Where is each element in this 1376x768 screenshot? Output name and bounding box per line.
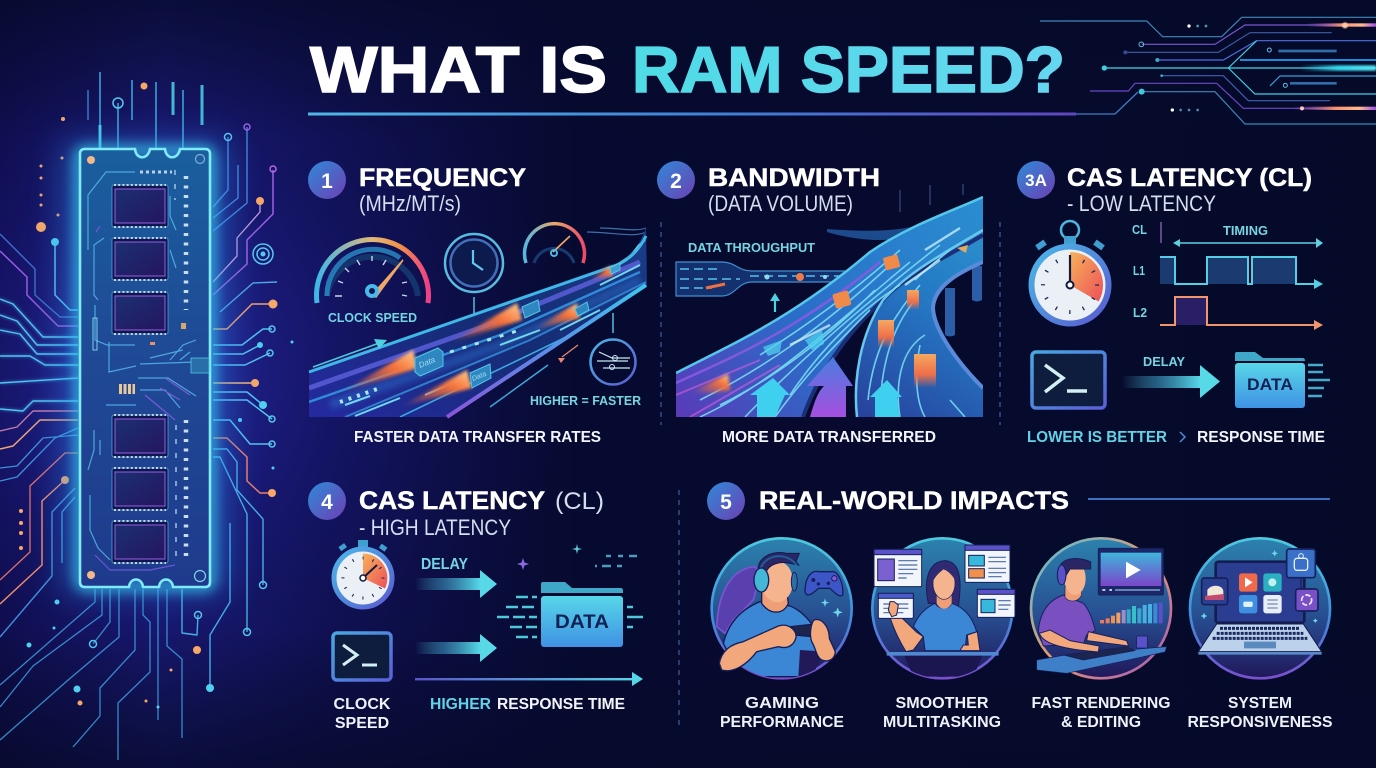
badge 4 xyxy=(308,482,346,520)
panel 2: bandwidth xyxy=(657,161,983,446)
panel 5: real-world impacts xyxy=(707,482,1333,731)
label fast rendering: & EDITING xyxy=(1061,714,1141,731)
icon: terminal xyxy=(333,633,391,680)
data packets: Data xyxy=(471,371,488,383)
caption frequency: FASTER DATA TRANSFER RATES xyxy=(354,429,601,446)
icon: laptop responsiveness xyxy=(1190,538,1330,678)
narrow pipe graphic xyxy=(676,262,845,296)
badge 3a: 3A xyxy=(1025,171,1047,190)
icon: gaming person xyxy=(712,538,852,678)
board traces xyxy=(88,172,196,570)
label system responsiveness: RESPONSIVENESS xyxy=(1188,714,1333,731)
subheading high latency: - HIGH LATENCY xyxy=(359,515,511,540)
arrow: command xyxy=(415,634,497,662)
label system responsiveness: SYSTEM xyxy=(1228,695,1292,712)
data packets: Data xyxy=(417,355,437,370)
label fast rendering xyxy=(1032,695,1170,731)
arrow: motion down xyxy=(490,345,578,407)
label clock speed: SPEED xyxy=(335,715,389,732)
panel 4: high latency xyxy=(308,482,643,732)
flyover road xyxy=(827,184,983,336)
badge 1: 1 xyxy=(321,170,333,193)
caption lower is better: RESPONSE TIME xyxy=(1197,429,1325,446)
label higher faster: HIGHER = FASTER xyxy=(530,394,641,408)
module glow xyxy=(60,140,230,595)
badge 3a xyxy=(1017,161,1055,199)
label gaming performance xyxy=(720,695,844,731)
icon: terminal xyxy=(1032,352,1105,408)
heading cas latency high: (CL) xyxy=(555,488,604,515)
label system responsiveness xyxy=(1188,695,1333,731)
subheading low latency: - LOW LATENCY xyxy=(1067,191,1216,216)
timing diagram xyxy=(1132,222,1323,330)
highway graphic xyxy=(309,228,647,417)
gold contact pins xyxy=(191,172,209,563)
title underline xyxy=(308,92,1138,116)
arrow: big purple xyxy=(807,357,853,417)
badge 2 xyxy=(657,161,695,199)
badge 1 xyxy=(308,161,346,199)
RAM module xyxy=(60,140,230,595)
arrow: response time xyxy=(415,672,643,686)
label clock speed: CLOCK SPEED xyxy=(328,311,417,325)
subheading mhz: (MHz/MT/s) xyxy=(359,191,461,216)
badge 5: 5 xyxy=(720,491,732,514)
heading cas latency: CAS LATENCY (CL) xyxy=(1067,164,1312,192)
caption lower is better: LOWER IS BETTER xyxy=(1027,429,1167,446)
icon: rendering person xyxy=(1031,538,1171,678)
timing diagram: L2 xyxy=(1133,306,1147,320)
caption bandwidth: MORE DATA TRANSFERRED xyxy=(722,429,936,446)
caption lower is better xyxy=(1027,429,1325,446)
label data throughput: DATA THROUGHPUT xyxy=(688,241,815,255)
label smoother multitasking: SMOOTHER xyxy=(896,695,989,712)
stopwatch xyxy=(334,540,392,607)
label smoother multitasking: MULTITASKING xyxy=(883,714,1001,731)
sparkles and dots xyxy=(517,544,637,570)
module board xyxy=(80,149,210,587)
stopwatch xyxy=(1032,221,1108,324)
title: WHAT IS xyxy=(310,33,607,106)
arrow: delay xyxy=(1122,365,1220,398)
icon: clock xyxy=(445,234,503,314)
label gaming performance: GAMING xyxy=(745,695,819,712)
gauge: clock speed xyxy=(316,240,428,303)
highway graphic xyxy=(676,197,983,417)
badge 4: 4 xyxy=(321,491,333,514)
icon: data folder: DATA xyxy=(555,612,609,633)
icon: multitasking person xyxy=(872,538,1015,678)
label clock speed: CLOCK xyxy=(334,696,391,713)
memory chips xyxy=(112,185,168,563)
badge 2: 2 xyxy=(670,170,682,193)
label gaming performance: PERFORMANCE xyxy=(720,714,844,731)
label delay: DELAY xyxy=(421,556,469,573)
caption higher response time: RESPONSE TIME xyxy=(497,696,625,713)
icon: data folder xyxy=(497,582,643,647)
timing diagram: TIMING xyxy=(1223,224,1268,238)
caption higher response time: HIGHER xyxy=(430,696,491,713)
label clock speed xyxy=(334,696,391,732)
icon: data folder: DATA xyxy=(1247,375,1293,394)
header circuit lines xyxy=(1040,17,1376,124)
arrow: delay xyxy=(415,570,497,598)
panel 3a: low latency xyxy=(1017,161,1330,446)
timing diagram: CL xyxy=(1132,223,1147,237)
label smoother multitasking xyxy=(883,695,1001,731)
heading cas latency high: CAS LATENCY xyxy=(359,487,545,515)
arrow: up to pipe xyxy=(770,293,780,312)
heading bandwidth: BANDWIDTH xyxy=(708,164,880,192)
small components xyxy=(87,154,206,582)
dashed dividers xyxy=(661,222,1000,730)
small gauge xyxy=(524,224,584,263)
circuit nodes and dots xyxy=(19,82,294,708)
icon: switch circle xyxy=(590,313,636,384)
arrow: motion up xyxy=(313,339,387,367)
title: RAM SPEED? xyxy=(632,33,1065,106)
title xyxy=(310,33,1065,106)
heading impacts: REAL-WORLD IMPACTS xyxy=(759,487,1069,515)
label delay: DELAY xyxy=(1143,354,1185,369)
heading frequency: FREQUENCY xyxy=(359,164,526,192)
caption higher response time xyxy=(430,696,625,713)
timing diagram: L1 xyxy=(1133,264,1145,278)
circuit traces: left side xyxy=(0,72,277,760)
subheading data volume: (DATA VOLUME) xyxy=(708,191,853,216)
label fast rendering: FAST RENDERING xyxy=(1032,695,1170,712)
icon: data folder xyxy=(1235,352,1330,408)
arrow: cyan lanes xyxy=(750,378,902,417)
panel 1: frequency xyxy=(308,161,647,446)
badge 5 xyxy=(707,482,745,520)
data packets xyxy=(340,263,620,407)
